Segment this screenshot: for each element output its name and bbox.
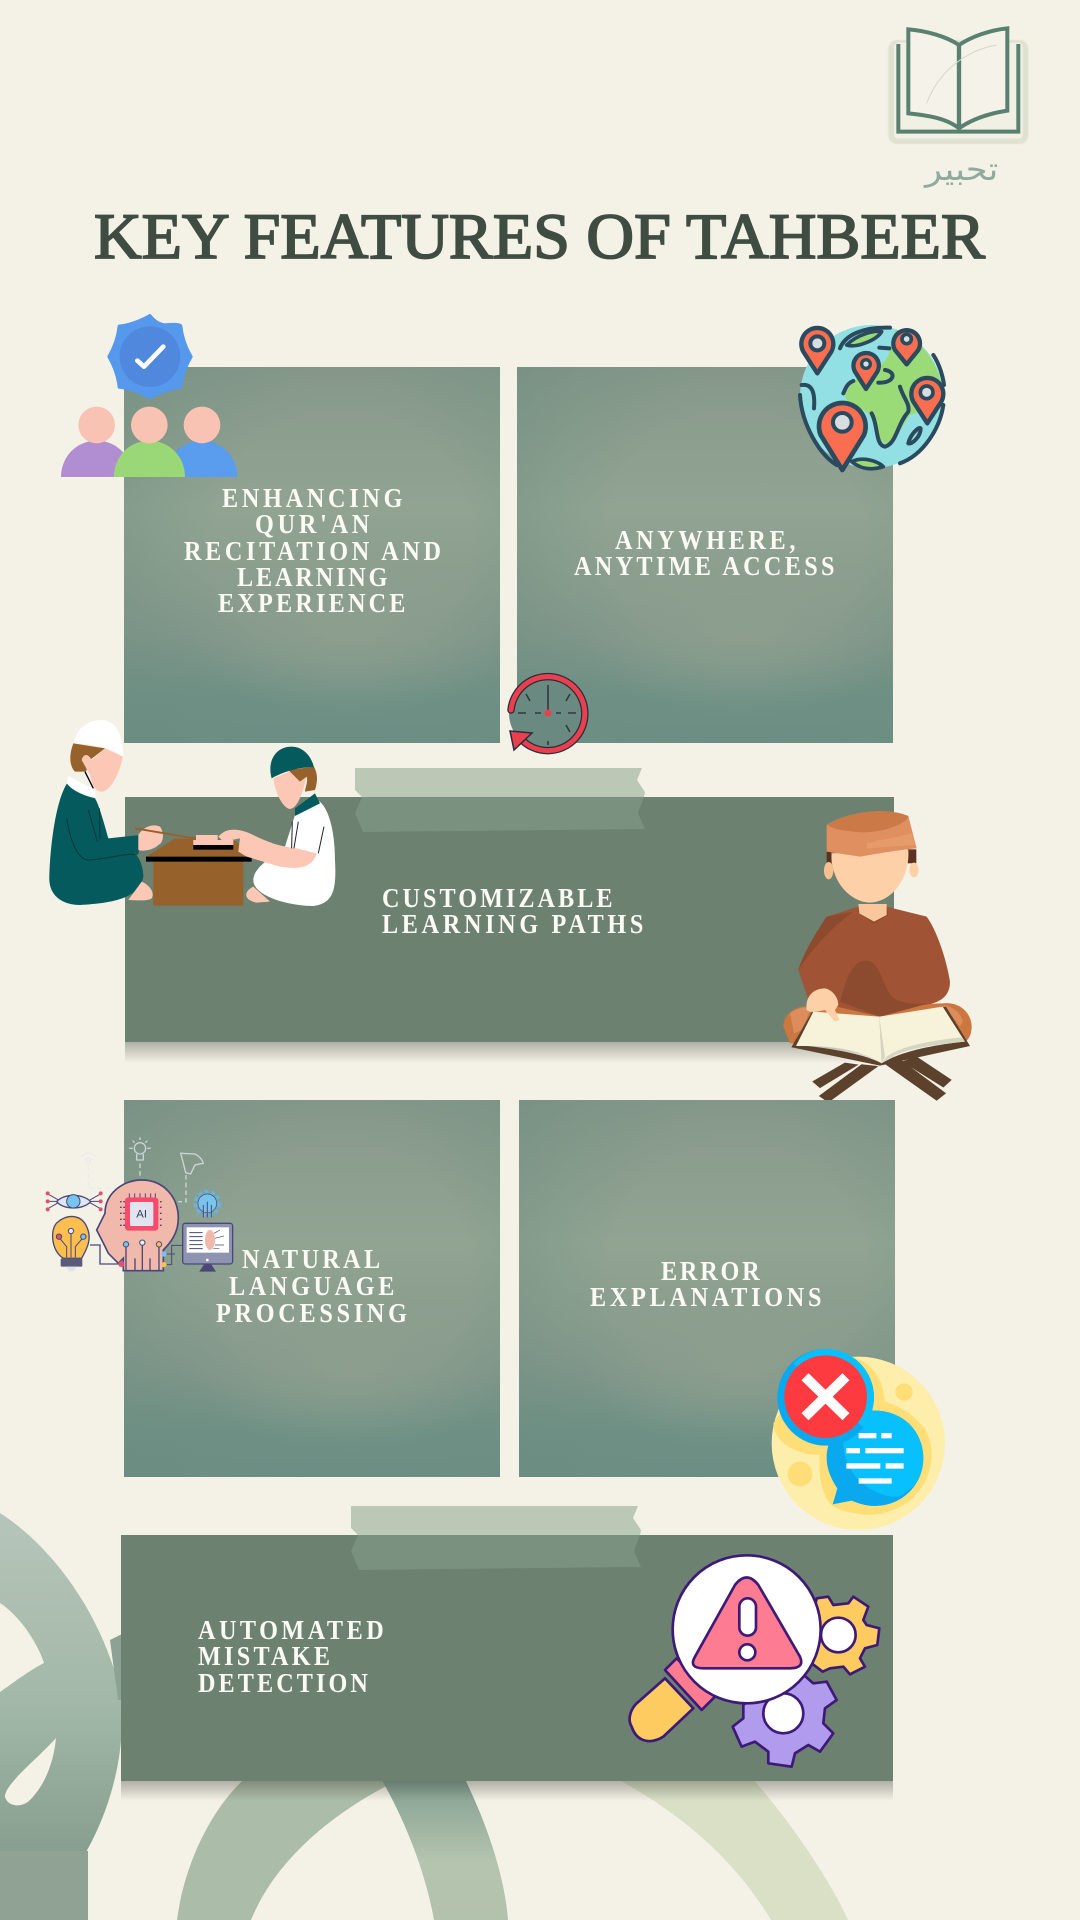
logo wordmark: تحبير: [923, 150, 998, 188]
panel text: error explanations: ERROR: [661, 1256, 760, 1286]
panel text: customizable: LEARNING PATHS: [382, 909, 643, 939]
icon: globe with pins: [800, 325, 944, 470]
panel text: natural language: LANGUAGE: [229, 1271, 394, 1301]
panel text: anywhere: [574, 525, 834, 581]
panel text: error explanations: EXPLANATIONS: [590, 1282, 821, 1312]
panel text: automated: [198, 1615, 384, 1698]
panel text: enhancing: RECITATION AND: [184, 536, 441, 566]
panel text: enhancing: [184, 483, 441, 618]
panel text: natural language: PROCESSING: [216, 1298, 407, 1328]
panel text: natural language: [216, 1244, 407, 1328]
logo: [888, 28, 1028, 188]
panel text: anywhere: ANYWHERE,: [615, 525, 795, 555]
icon: error chat bubbles: [772, 1349, 945, 1530]
panel: customizable learning paths: [125, 768, 894, 1063]
panel: enhancing recitation: [124, 367, 500, 743]
icon: teacher and student at a desk: [49, 720, 335, 906]
panel: natural language processing: [124, 1100, 500, 1477]
panel text: enhancing: QUR'AN: [255, 509, 370, 539]
panel text: customizable: [382, 883, 643, 939]
panel text: automated: MISTAKE: [198, 1641, 330, 1671]
panel text: enhancing: ENHANCING: [222, 483, 402, 513]
panel text: natural language: NATURAL: [242, 1244, 380, 1274]
icon: magnifier warning with gears: [630, 1555, 879, 1767]
panel text: automated: DETECTION: [198, 1668, 368, 1698]
panel text: enhancing: EXPERIENCE: [218, 588, 405, 618]
panel: automated mistake detection: [121, 1506, 893, 1801]
panel text: enhancing: LEARNING: [237, 562, 387, 592]
decorative arcs: bottom centre: [177, 1770, 848, 1920]
icon: clock with return arrow: [509, 674, 587, 752]
panel text: automated: AUTOMATED: [198, 1615, 384, 1645]
panel text: customizable: CUSTOMIZABLE: [382, 883, 613, 913]
panel: anywhere anytime: [517, 367, 893, 743]
title: KEY FEATURES OF TAHBEER: [94, 201, 986, 273]
icon: AI head: AI: [136, 1209, 147, 1221]
panel text: anywhere: ANYTIME ACCESS: [574, 551, 834, 581]
tape: [351, 1506, 641, 1570]
icon: people with badge: [61, 315, 237, 477]
tape: [355, 768, 645, 832]
icon: AI head: [46, 1137, 233, 1272]
panel text: error explanations: [590, 1256, 821, 1312]
decorative coil: bottom left: [0, 1513, 122, 1920]
panel: error explanations: [519, 1100, 895, 1477]
icon: boy reading quran: [783, 811, 972, 1102]
